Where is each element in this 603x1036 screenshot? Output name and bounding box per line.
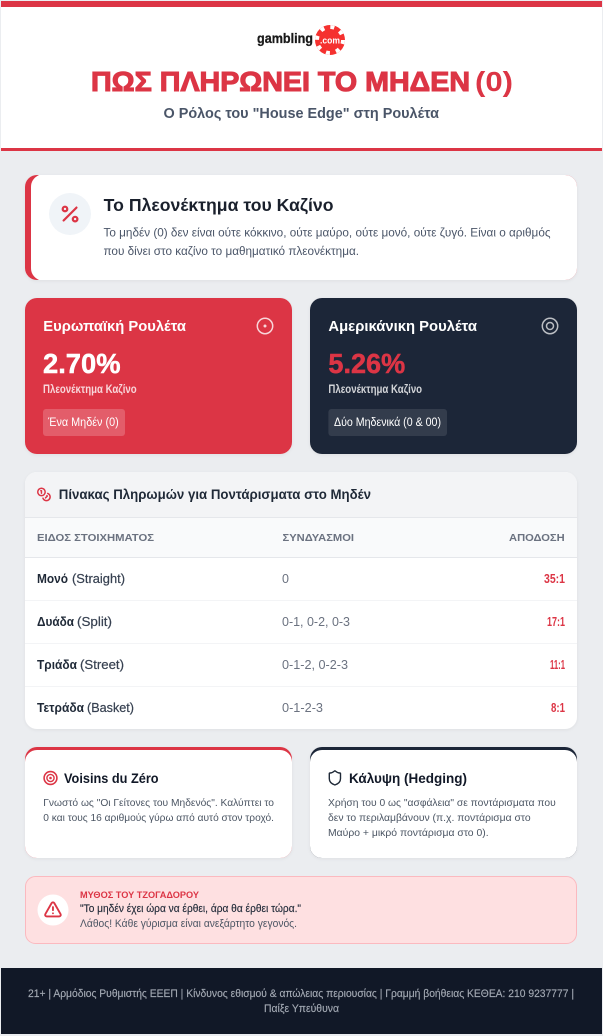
voisins heading: Voisins du Zéro	[64, 770, 159, 786]
row: straight: (Straight)	[72, 572, 125, 586]
american heading: Αμερικάνικη Ρουλέτα	[328, 318, 478, 335]
hedging text	[328, 797, 556, 839]
row: split: 17:1	[547, 615, 565, 629]
icon: warning	[38, 894, 68, 926]
row: street: Τριάδα	[37, 658, 77, 672]
hedging text: Χρήση του 0 ως "ασφάλεια" σε ποντάρισματα που	[328, 797, 556, 809]
american house edge: 5.26%	[328, 348, 405, 379]
row: split: Δυάδα	[37, 615, 74, 629]
row: street: 0-1-2, 0-2-3	[282, 658, 348, 672]
row: basket: 8:1	[551, 701, 565, 715]
table column headers: ΑΠΟΔΟΣΗ	[509, 532, 565, 544]
voisins text	[43, 797, 274, 824]
logo: gambling.com: .com	[320, 36, 340, 46]
panel: american roulette	[310, 298, 577, 454]
european heading: Ευρωπαϊκή Ρουλέτα	[43, 318, 187, 335]
table column headers: ΕΙΔΟΣ ΣΤΟΙΧΗΜΑΤΟΣ	[37, 532, 154, 544]
row: street: (Street)	[80, 658, 124, 672]
panel: payout table	[25, 472, 577, 729]
icon: shield	[329, 771, 340, 785]
row: split: (Split)	[77, 615, 112, 629]
icon: percent	[49, 193, 91, 235]
row: basket: Τετράδα	[37, 701, 84, 715]
panel: hedging	[310, 747, 577, 858]
myth label: ΜΥΘΟΣ ΤΟΥ ΤΖΟΓΑΔΟΡΟΥ	[80, 890, 200, 901]
table column headers: ΣΥΝΔΥΑΣΜΟΙ	[282, 532, 354, 544]
myth correction: Λάθος! Κάθε γύρισμα είναι ανεξάρτητο γεγονός.	[80, 918, 297, 930]
header	[1, 1, 602, 151]
row: street: 11:1	[550, 658, 565, 672]
footer	[1, 968, 602, 1034]
intro text: Το μηδέν (0) δεν είναι ούτε κόκκινο, ούτε μαύρο, ούτε μονό, ούτε ζυγό. Είναι ο αριθμός	[104, 226, 551, 240]
row: street	[37, 658, 565, 672]
subtitle: Ο Ρόλος του "House Edge" στη Ρουλέτα	[164, 106, 439, 122]
row: straight: Μονό	[37, 572, 68, 586]
intro text: που δίνει στο καζίνο το μαθηματικό πλεονέκτημα.	[104, 244, 359, 258]
row: basket	[37, 701, 565, 715]
hedging heading: Κάλυψη (Hedging)	[349, 770, 467, 786]
intro heading: Το Πλεονέκτημα του Καζίνο	[104, 195, 334, 216]
row: straight	[37, 572, 565, 586]
hedging text: δεν το περιλαμβάνουν (π.χ. ποντάρισμα στο	[328, 812, 531, 824]
intro text	[104, 226, 551, 258]
row: basket: (Basket)	[87, 701, 134, 715]
callout: gambler's myth	[26, 876, 576, 944]
logo: gambling.com	[257, 25, 345, 55]
row: straight: 35:1	[544, 572, 565, 586]
american label: Πλεονέκτημα Καζίνο	[328, 384, 422, 396]
icon: coins	[38, 488, 50, 501]
panel: voisins du zero	[25, 747, 292, 858]
title zero: (0)	[475, 66, 513, 97]
row: straight: 0	[282, 572, 289, 586]
row: split	[37, 615, 565, 629]
myth quote: "Το μηδέν έχει ώρα να έρθει, άρα θα έρθει τώρα."	[80, 903, 301, 915]
icon: single-zero wheel	[257, 318, 273, 334]
european house edge: 2.70%	[43, 348, 121, 379]
american badge: Δύο Μηδενικά (0 & 00)	[334, 417, 441, 429]
icon: double-zero wheel	[542, 318, 558, 334]
hedging text: Μαύρο + μικρό ποντάρισμα στο 0).	[328, 827, 489, 839]
voisins text: Γνωστό ως "Οι Γείτονες του Μηδενός". Καλύπτει το	[43, 797, 274, 809]
footer: Παίξε Υπεύθυνα	[264, 1003, 340, 1015]
european badge: Ένα Μηδέν (0)	[47, 417, 119, 429]
american badge	[328, 409, 447, 436]
panel: european roulette	[25, 298, 292, 454]
footer: 21+ | Αρμόδιος Ρυθμιστής ΕΕΕΠ | Κίνδυνος εθισμού & απώλειας περιουσίας | Γραμμή βοήθειας ΚΕΘΕΑ: 210 9237777 |	[28, 988, 574, 1000]
icon: target	[44, 772, 57, 784]
table column headers	[37, 532, 565, 544]
row: basket: 0-1-2-3	[282, 701, 323, 715]
european label: Πλεονέκτημα Καζίνο	[43, 384, 137, 396]
voisins text: 0 και τους 16 αριθμούς γύρω από αυτό στον τροχό.	[43, 812, 274, 824]
logo: gambling.com: gambling	[257, 30, 313, 46]
table title: Πίνακας Πληρωμών για Ποντάρισματα στο Μηδέν	[59, 487, 371, 502]
european badge	[43, 409, 125, 436]
panel: house advantage intro	[25, 175, 577, 280]
row: split: 0-1, 0-2, 0-3	[282, 615, 350, 629]
title: ΠΩΣ ΠΛΗΡΩΝΕΙ ΤΟ ΜΗΔΕΝ	[91, 66, 470, 97]
